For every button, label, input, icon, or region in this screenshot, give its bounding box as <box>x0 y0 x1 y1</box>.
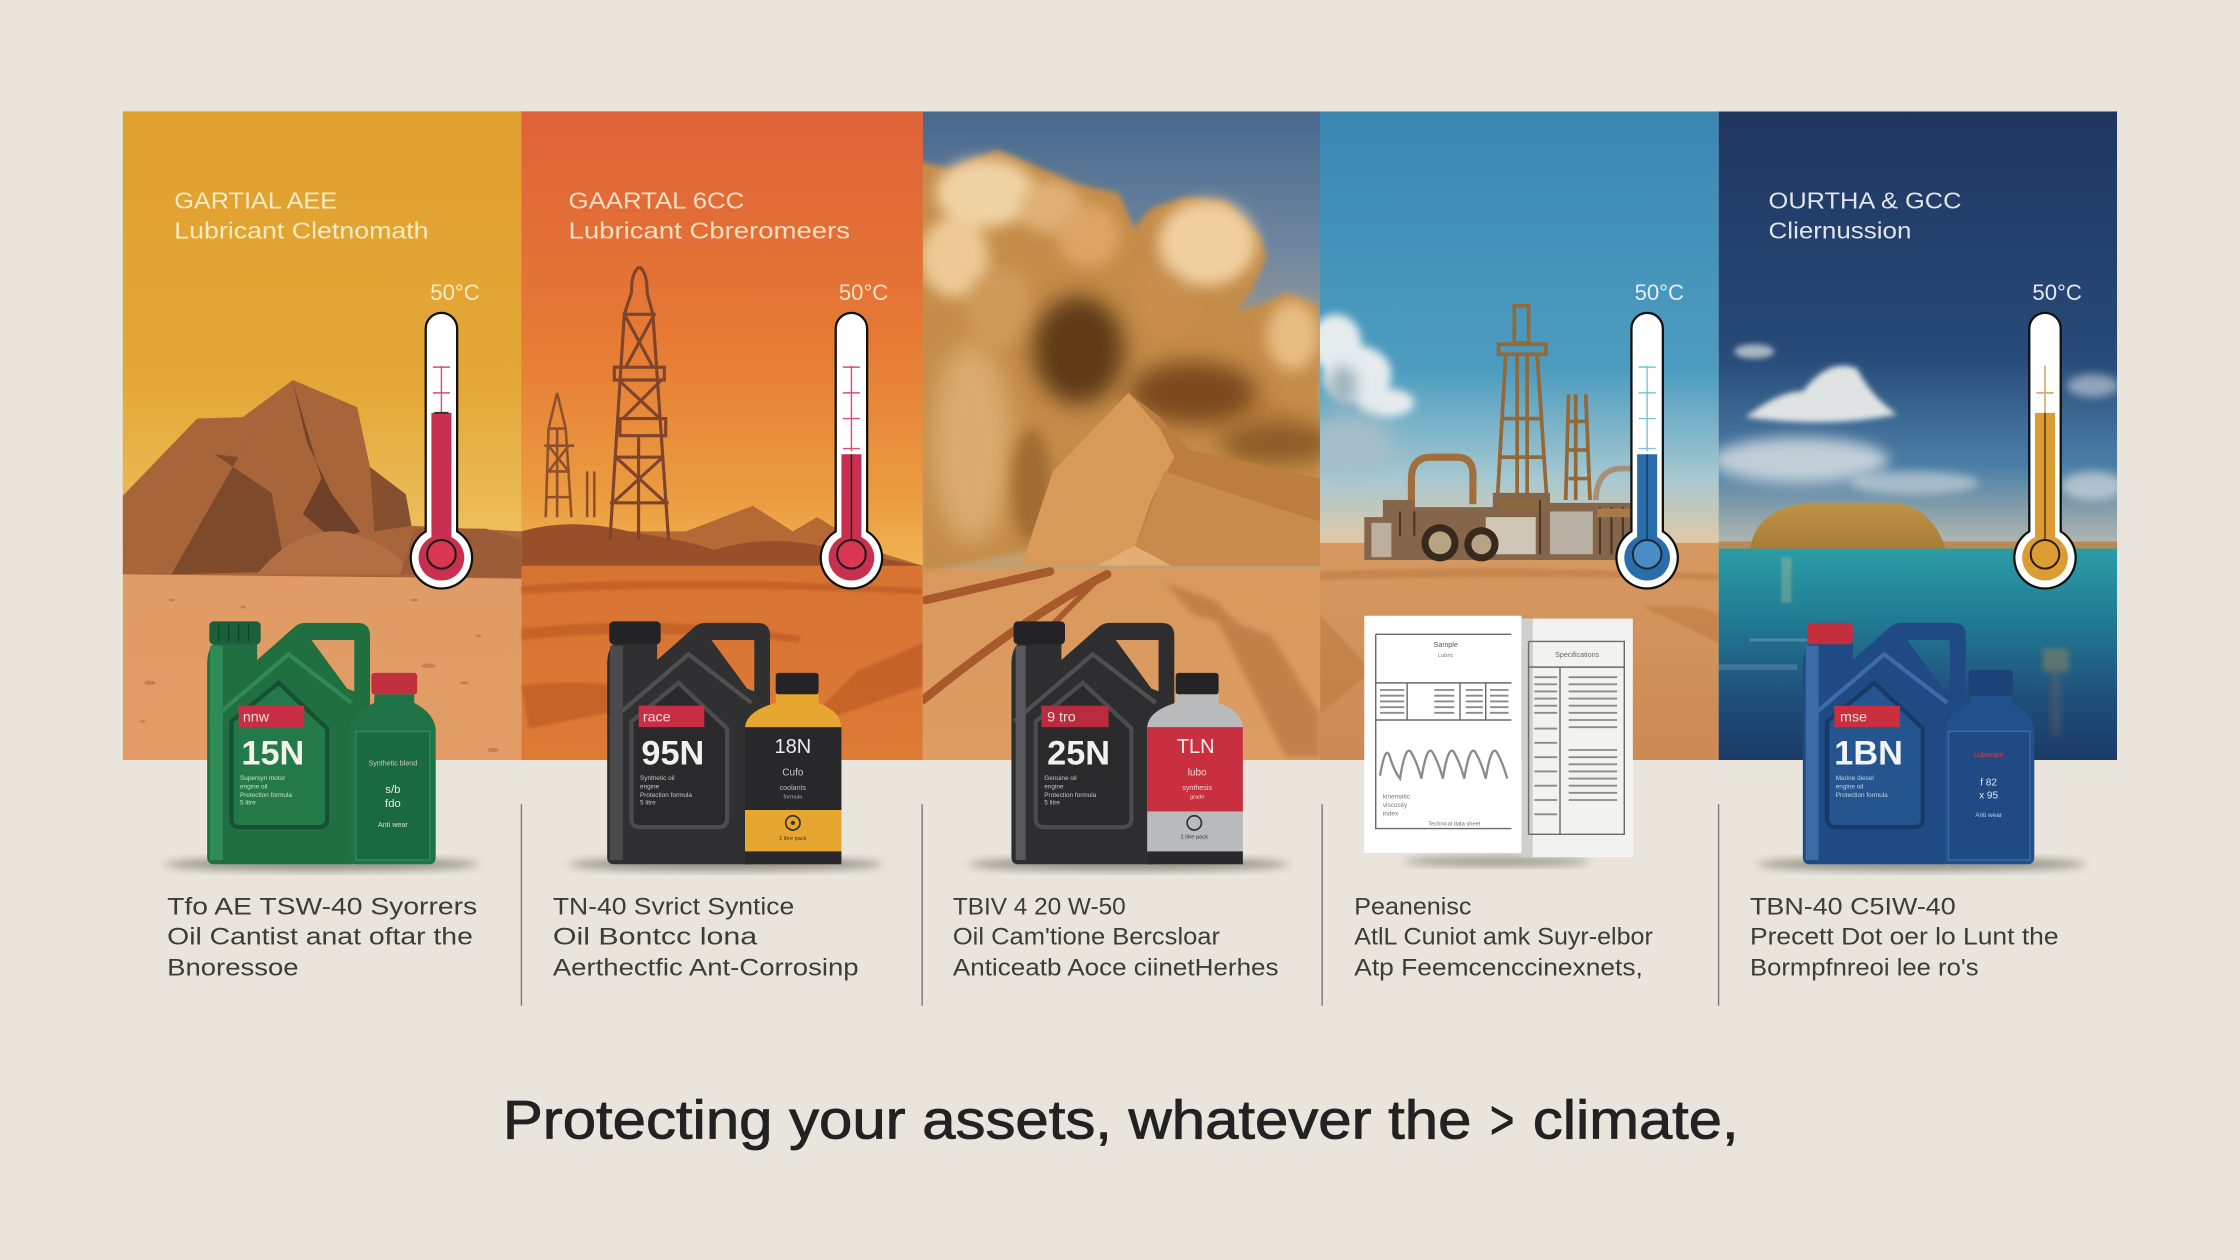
document: technical data sheets: Lubric <box>1438 653 1454 659</box>
caption: column 3: TBIV 4 20 W-50 <box>953 893 1126 920</box>
icon: thermometer panel 4 <box>1616 280 1684 589</box>
illustration: drilling tower <box>1497 306 1590 504</box>
product: black and yellow oil bottles: 95N <box>641 734 704 772</box>
product: blue oil bottles: Anti wear <box>1975 812 2003 819</box>
product: blue oil bottles: mse <box>1840 709 1867 725</box>
caption: column 5: Bormpfnreoi lee ro's <box>1750 955 1979 982</box>
heading: panel 1 title <box>174 188 429 244</box>
heading: panel 5 title <box>1769 188 1961 244</box>
icon: thermometer panel 1 <box>411 280 480 589</box>
caption: column 3 <box>953 893 1279 982</box>
icon: thermometer panel 4: 50°C <box>1635 280 1684 305</box>
caption: column 1 <box>167 893 477 982</box>
illustration: ground speckles <box>140 599 499 752</box>
product: blue oil bottles: Lubricant <box>1974 751 2003 759</box>
product: blue oil bottles <box>1757 623 2086 871</box>
icon: thermometer panel 5: 50°C <box>2032 280 2082 305</box>
heading: panel 2 title: GAARTAL 6CC <box>569 188 744 214</box>
document: technical data sheets: index <box>1383 811 1399 818</box>
illustration: clouds <box>1711 344 2124 500</box>
product: green oil bottles: fdo <box>385 798 401 810</box>
product: black and silver oil bottles: 1 litre pack <box>1180 835 1208 841</box>
caption: column 4 <box>1354 893 1653 982</box>
caption: column 1: Oil Cantist anat oftar the <box>167 923 473 950</box>
caption: column 1: Tfo AE TSW-40 Syorrers <box>167 893 477 920</box>
product: black and yellow oil bottles: 18N <box>775 736 811 758</box>
illustration: distant hills <box>521 506 923 566</box>
product: black and yellow oil bottles <box>569 621 883 871</box>
icon: thermometer panel 2: 50°C <box>839 280 888 305</box>
title: tagline: > <box>1490 1090 1514 1151</box>
heading: panel 5 title: Cliernussion <box>1769 218 1911 244</box>
illustration: rough sand <box>1164 583 1320 757</box>
product: green oil bottles <box>164 621 479 871</box>
divider lines <box>521 804 1719 1006</box>
panel: navy coastal <box>1711 111 2124 760</box>
chart: viscosity wave <box>1380 751 1507 779</box>
product: black and yellow oil bottles: 5 litre <box>640 799 656 806</box>
product: black and yellow oil bottles: engine <box>640 784 660 791</box>
product: black and yellow oil bottles: Protection formula <box>640 792 692 799</box>
caption: column 5 <box>1750 893 2059 982</box>
title: tagline: climate, <box>1533 1090 1739 1151</box>
document: technical data sheets: Specifications <box>1555 651 1600 659</box>
illustration: cloud <box>1307 314 1414 477</box>
caption: column 2: Oil Bontcc lona <box>553 923 758 950</box>
product: blue oil bottles: f 82 <box>1980 778 1997 789</box>
product: green oil bottles: nnw <box>243 709 270 725</box>
illustration: dust cloud <box>914 150 1336 571</box>
product: black and silver oil bottles: Genuine oil <box>1044 775 1077 782</box>
caption: column 5: Precett Dot oer lo Lunt the <box>1750 923 2059 950</box>
caption: column 5: TBN-40 C5IW-40 <box>1750 893 1956 920</box>
product: black and silver oil bottles: lubo <box>1188 768 1207 779</box>
product: green oil bottles: Protection formula <box>240 792 292 799</box>
product: black and silver oil bottles: 9 tro <box>1047 709 1076 725</box>
product: black and silver oil bottles: 5 litre <box>1044 799 1060 806</box>
caption: column 2: Aerthectfic Ant-Corrosinp <box>553 955 859 982</box>
product: black and silver oil bottles: Protection formula <box>1044 792 1097 799</box>
product: blue oil bottles: Protection formula <box>1836 792 1888 799</box>
panel: sandstorm <box>914 111 1336 760</box>
product: black and silver oil bottles: 25N <box>1047 734 1110 772</box>
caption: column 3: Anticeatb Aoce ciinetHerhes <box>953 955 1279 982</box>
product: blue oil bottles: 1BN <box>1834 734 1903 772</box>
heading: panel 1 title: GARTIAL AEE <box>174 188 337 214</box>
illustration: sand cliff <box>1021 393 1320 566</box>
illustration: tire tracks <box>923 571 1107 700</box>
panel: orange oil rigs <box>521 111 923 760</box>
product: black and yellow oil bottles: formula <box>783 795 803 801</box>
product: blue oil bottles: Marine diesel <box>1836 775 1874 782</box>
product: black and silver oil bottles: grade <box>1190 795 1204 801</box>
chart: table rows <box>1380 677 1617 814</box>
product: green oil bottles: Synthetic blend <box>368 760 417 768</box>
product: green oil bottles: 5 litre <box>240 799 256 806</box>
caption: column 1: Bnoressoe <box>167 955 299 982</box>
product: black and silver oil bottles: synthesis <box>1182 784 1212 792</box>
illustration: large oil rig <box>610 267 669 540</box>
product: black and silver oil bottles: TLN <box>1177 736 1215 758</box>
caption: column 4: Atp Feemcenccinexnets, <box>1354 955 1643 982</box>
icon: thermometer panel 1: 50°C <box>430 280 480 305</box>
panel: blue sky plant <box>1307 111 1719 760</box>
product: black and yellow oil bottles: Cufo <box>782 768 804 779</box>
product: black and yellow oil bottles: race <box>643 709 671 725</box>
product: black and silver oil bottles: engine <box>1044 784 1064 791</box>
product: green oil bottles: Supersyn motor <box>240 775 286 782</box>
document: technical data sheets: Technical data sheet <box>1428 822 1481 828</box>
product: black and yellow oil bottles: coolants <box>780 784 807 792</box>
caption: column 4: Peanenisc <box>1354 893 1471 920</box>
caption: column 4: AtlL Cuniot amk Suyr-elbor <box>1354 923 1653 950</box>
illustration: ground streaks <box>521 581 923 729</box>
illustration: storage dome <box>1719 503 2117 549</box>
document: technical data sheets: Sample <box>1434 641 1458 649</box>
product: black and silver oil bottles <box>969 621 1289 871</box>
document: technical data sheets: viscosity <box>1383 802 1408 809</box>
title: tagline: Protecting your assets, whatever the <box>503 1090 1471 1151</box>
heading: panel 1 title: Lubricant Cletnomath <box>174 218 429 244</box>
illustration: water reflections <box>1719 557 2069 736</box>
illustration: processing plant <box>1364 457 1640 561</box>
icon: thermometer panel 5 <box>2014 280 2082 589</box>
heading: panel 5 title: OURTHA & GCC <box>1769 188 1961 214</box>
product: green oil bottles: Anti wear <box>378 821 408 829</box>
document: technical data sheets <box>1364 616 1633 866</box>
caption: column 3: Oil Cam'tione Bercsloar <box>953 923 1220 950</box>
product: black and yellow oil bottles: Synthetic oil <box>640 775 675 782</box>
illustration: rock formation <box>123 380 521 579</box>
illustration: sand ripples <box>1320 568 1719 714</box>
illustration: small oil rig <box>544 393 594 517</box>
product: blue oil bottles: engine oil <box>1836 784 1863 791</box>
product: green oil bottles: engine oil <box>240 784 267 791</box>
caption: column 2 <box>553 893 859 982</box>
product: black and yellow oil bottles: 1 litre pack <box>779 836 807 842</box>
heading: panel 2 title: Lubricant Cbreromeers <box>569 218 850 244</box>
chart: sheet table <box>1376 634 1624 834</box>
product: blue oil bottles: x 95 <box>1979 791 1998 802</box>
product: green oil bottles: 15N <box>241 734 304 772</box>
caption: column 2: TN-40 Svrict Syntice <box>553 893 794 920</box>
document: technical data sheets: kinematic <box>1383 794 1411 801</box>
product: green oil bottles: s/b <box>385 784 400 796</box>
panel: orange desert with rock <box>123 111 521 760</box>
heading: panel 2 title <box>569 188 850 244</box>
icon: thermometer panel 2 <box>821 280 888 589</box>
